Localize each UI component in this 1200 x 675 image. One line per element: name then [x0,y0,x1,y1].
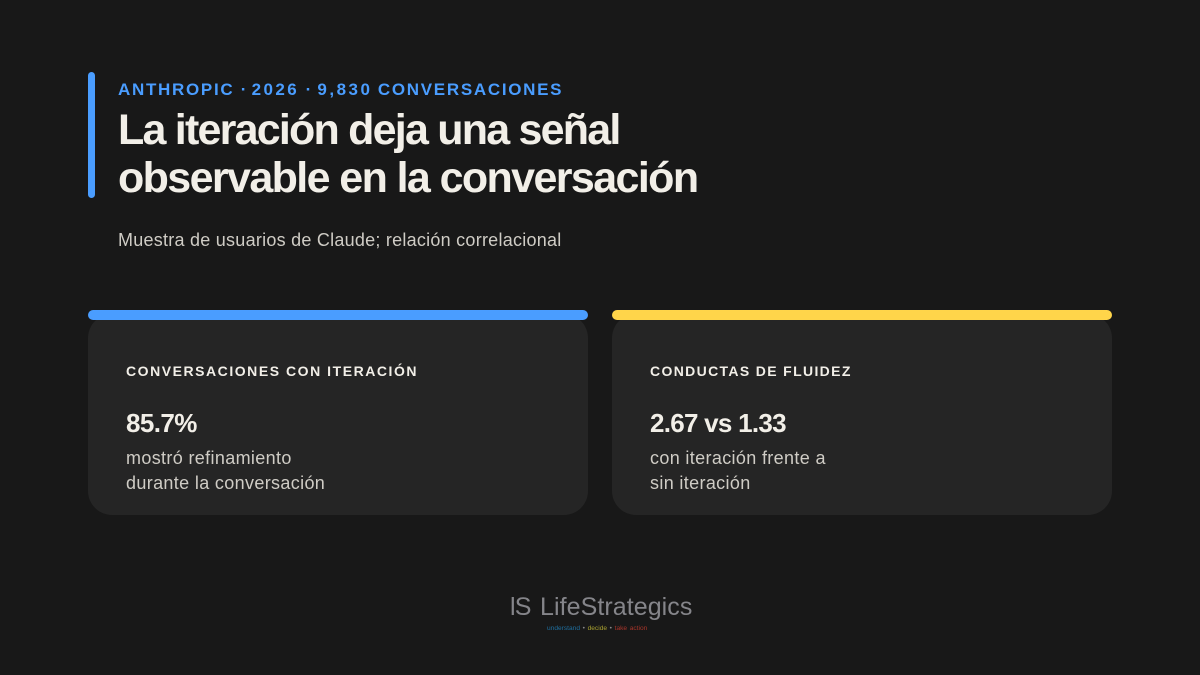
panel heading: CONVERSACIONES CON ITERACIÓN [126,363,418,379]
logo: LifeStrategics [510,593,692,632]
stat description: mostró refinamiento [126,448,292,468]
panel heading: CONDUCTAS DE FLUIDEZ [650,363,852,379]
stat: 85.7%: 85.7% [126,408,197,438]
logo mark: lS [510,593,531,621]
stat description: sin iteración [650,473,751,493]
panel: conductas de fluidez [612,314,1112,515]
panel: conversaciones con iteración [88,314,588,515]
stat description [126,448,325,493]
stat: 2.67 vs 1.33: 2.67 vs 1.33 [650,408,786,438]
title: observable en la conversación [118,154,697,202]
title [118,106,697,202]
eyebrow: ANTHROPIC · 2026 · 9,830 CONVERSACIONES [118,80,563,99]
stat description: durante la conversación [126,473,325,493]
logo tagline: understand • decide • take action [547,625,647,632]
logo wordmark: LifeStrategics [540,593,692,621]
panel accent: blue [88,310,588,320]
panel accent: yellow [612,310,1112,320]
title: La iteración deja una señal [118,106,620,154]
stat description: con iteración frente a [650,448,826,468]
subtitle: Muestra de usuarios de Claude; relación correlacional [118,230,561,250]
accent bar [88,72,95,198]
stat description [650,448,826,493]
